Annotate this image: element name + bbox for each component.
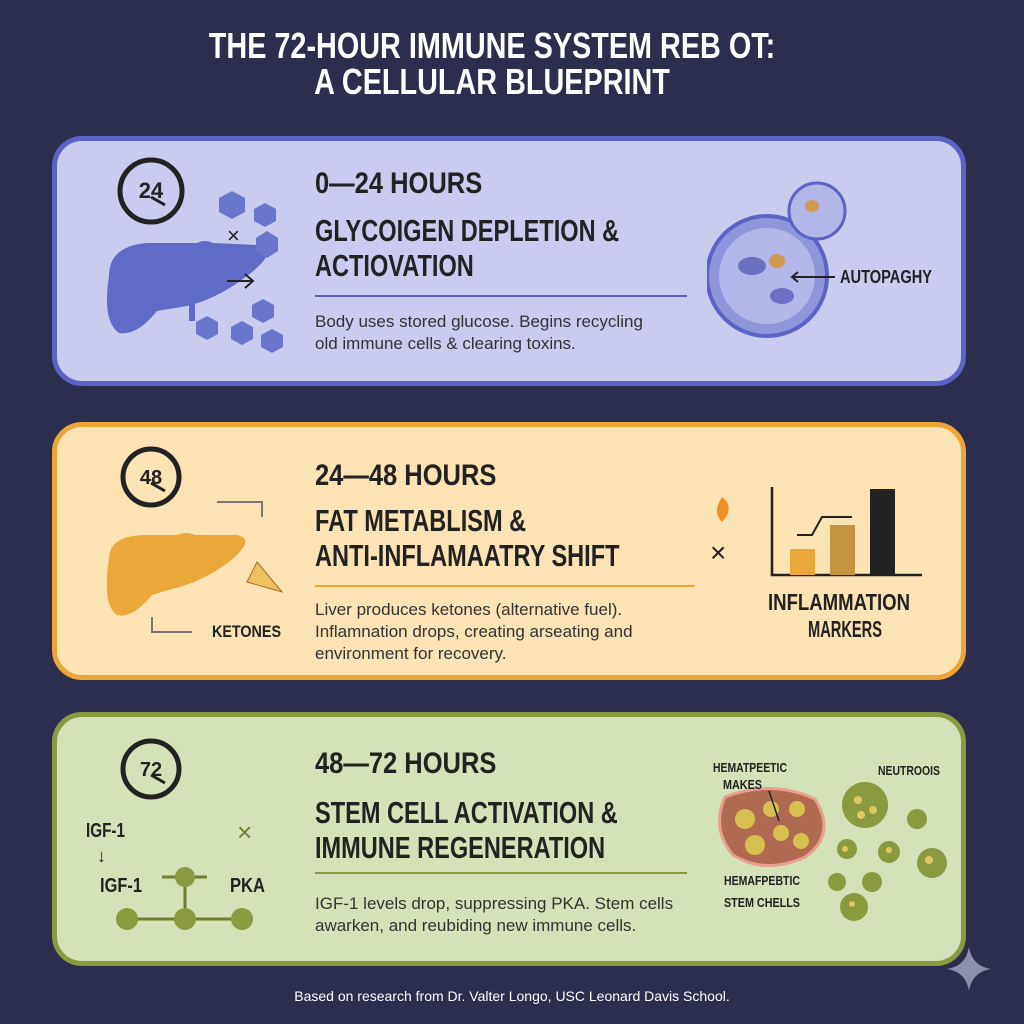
text block bbox=[315, 894, 673, 935]
icon: liver and glycogen hexagons bbox=[106, 191, 283, 353]
panel: 0-24 hours: ACTIOVATION bbox=[315, 248, 474, 283]
title bbox=[209, 25, 775, 102]
text block: environment for recovery. bbox=[315, 644, 506, 663]
icon: IGF-1 / PKA pathway: PKA bbox=[230, 875, 265, 897]
title: A CELLULAR BLUEPRINT bbox=[314, 61, 670, 102]
icon: sparkle bbox=[947, 947, 991, 991]
icon: hematopoietic stem cells: NEUTROOIS bbox=[878, 763, 940, 778]
panel: 24-48 hours: ANTI-INFLAMAATRY SHIFT bbox=[315, 538, 619, 573]
bar chart: inflammation markers bbox=[710, 487, 922, 642]
icon: IGF-1 / PKA pathway: IGF-1 bbox=[86, 820, 125, 842]
icon: clock 48 bbox=[120, 446, 182, 508]
icon: autophagy cell: AUTOPAGHY bbox=[840, 267, 932, 287]
text block: Inflamnation drops, creating arseating and bbox=[315, 622, 633, 641]
bar chart: inflammation markers: MARKERS bbox=[808, 616, 882, 642]
icon: hematopoietic stem cells: STEM CHELLS bbox=[724, 895, 800, 910]
icon: clock 72: 72 bbox=[140, 759, 162, 781]
text block: awarken, and reubiding new immune cells. bbox=[315, 916, 636, 935]
panel: 48-72 hours: STEM CELL ACTIVATION & bbox=[315, 795, 618, 830]
panel: 0-24 hours bbox=[52, 136, 966, 386]
icon: liver producing ketones: KETONES bbox=[212, 622, 281, 641]
icon: clock 48: 48 bbox=[140, 467, 162, 489]
heading: 48—72 HOURS bbox=[315, 747, 496, 780]
title: THE 72-HOUR IMMUNE SYSTEM REB OT: bbox=[209, 25, 775, 66]
icon: IGF-1 / PKA pathway: ↓ bbox=[97, 846, 106, 866]
heading: 0—24 HOURS bbox=[315, 167, 482, 200]
text block bbox=[315, 312, 643, 353]
panel: 0-24 hours: GLYCOIGEN DEPLETION & bbox=[315, 213, 619, 248]
icon: hematopoietic stem cells: HEMAFPEBTIC bbox=[724, 873, 800, 888]
panel: 48-72 hours bbox=[52, 712, 966, 966]
icon: hematopoietic stem cells: HEMATPEETIC bbox=[713, 760, 787, 775]
icon: hematopoietic stem cells: MAKES bbox=[723, 777, 762, 792]
heading: 24—48 HOURS bbox=[315, 459, 496, 492]
text block: old immune cells & clearing toxins. bbox=[315, 334, 576, 353]
panel: 24-48 hours: FAT METABLISM & bbox=[315, 503, 526, 538]
text block: IGF-1 levels drop, suppressing PKA. Stem cells bbox=[315, 894, 673, 913]
panel: 48-72 hours: IMMUNE REGENERATION bbox=[315, 830, 605, 865]
icon: liver producing ketones bbox=[106, 501, 284, 641]
icon: autophagy cell bbox=[707, 182, 932, 338]
icon: hematopoietic stem cells bbox=[713, 760, 947, 921]
panel: 24-48 hours bbox=[52, 422, 966, 680]
text block: Body uses stored glucose. Begins recycling bbox=[315, 312, 643, 331]
icon: clock 24: 24 bbox=[139, 178, 164, 203]
text block: Liver produces ketones (alternative fuel). bbox=[315, 600, 622, 619]
icon: IGF-1 / PKA pathway: IGF-1 bbox=[100, 875, 142, 897]
text block bbox=[315, 600, 633, 663]
icon: clock 72 bbox=[120, 738, 182, 800]
icon: IGF-1 / PKA pathway: × bbox=[237, 817, 252, 847]
icon: liver and glycogen hexagons: × bbox=[227, 223, 240, 248]
footer source: Based on research from Dr. Valter Longo, USC Leonard Davis School. bbox=[294, 988, 730, 1004]
icon: clock 24 bbox=[118, 158, 184, 224]
bar chart: inflammation markers: × bbox=[710, 537, 726, 568]
icon: IGF-1 / PKA pathway bbox=[86, 817, 265, 930]
